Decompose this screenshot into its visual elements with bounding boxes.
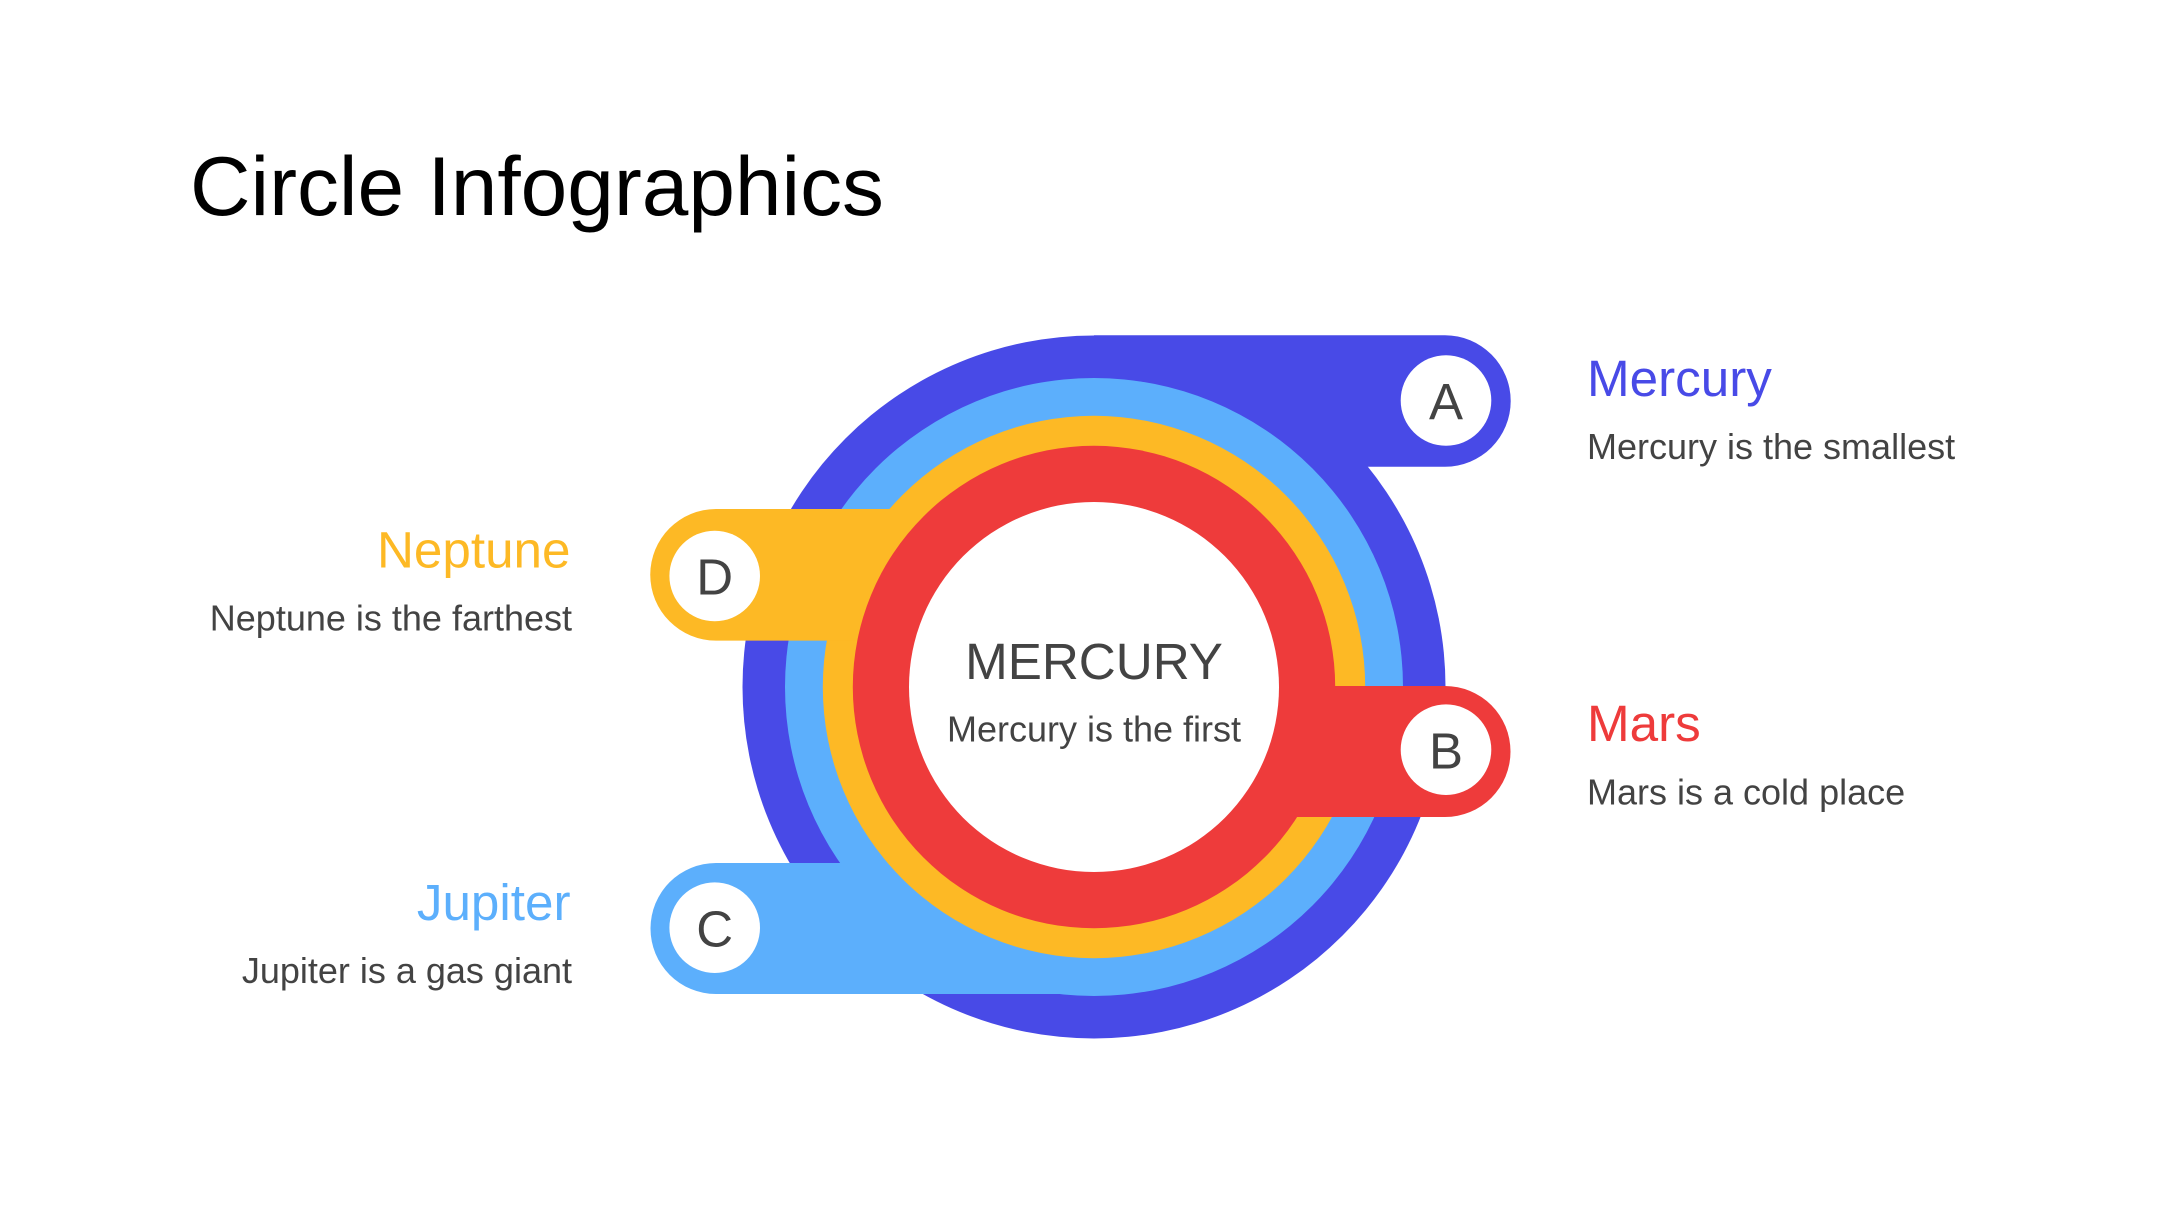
ring and tab: Neptune D (650, 416, 1365, 958)
badge B: B (1429, 722, 1463, 779)
label: Mars: Mars is a cold place (1587, 772, 1905, 812)
badge C (669, 882, 760, 973)
label: Mercury (1587, 350, 1955, 467)
badge C: C (696, 900, 733, 958)
label: Mercury: Mercury is the smallest (1587, 426, 1955, 467)
label: Mars (1587, 695, 1905, 812)
label: Jupiter (242, 874, 572, 991)
center text: MERCURY (965, 633, 1223, 690)
center text: Mercury is the first (947, 708, 1241, 750)
ring and tab: Mars B (853, 446, 1510, 928)
title: Circle Infographics (190, 139, 884, 233)
badge A: A (1429, 373, 1463, 430)
label: Jupiter: Jupiter is a gas giant (242, 950, 572, 991)
badge D: D (696, 548, 733, 606)
badge B (1401, 704, 1491, 795)
center white circle (909, 502, 1279, 872)
ring and tab: Jupiter C (650, 378, 1403, 996)
label: Neptune: Neptune is the farthest (210, 598, 572, 638)
label: Jupiter: Jupiter (417, 874, 570, 931)
label: Neptune (210, 521, 572, 638)
badge D (669, 531, 760, 621)
label: Neptune: Neptune (377, 521, 570, 578)
circle diagram (650, 335, 1511, 1038)
center text (947, 633, 1241, 750)
label: Mars: Mars (1587, 695, 1701, 752)
label: Mercury: Mercury (1587, 350, 1772, 407)
ring and tab: Mercury A (742, 335, 1511, 1038)
badge A (1401, 355, 1491, 446)
